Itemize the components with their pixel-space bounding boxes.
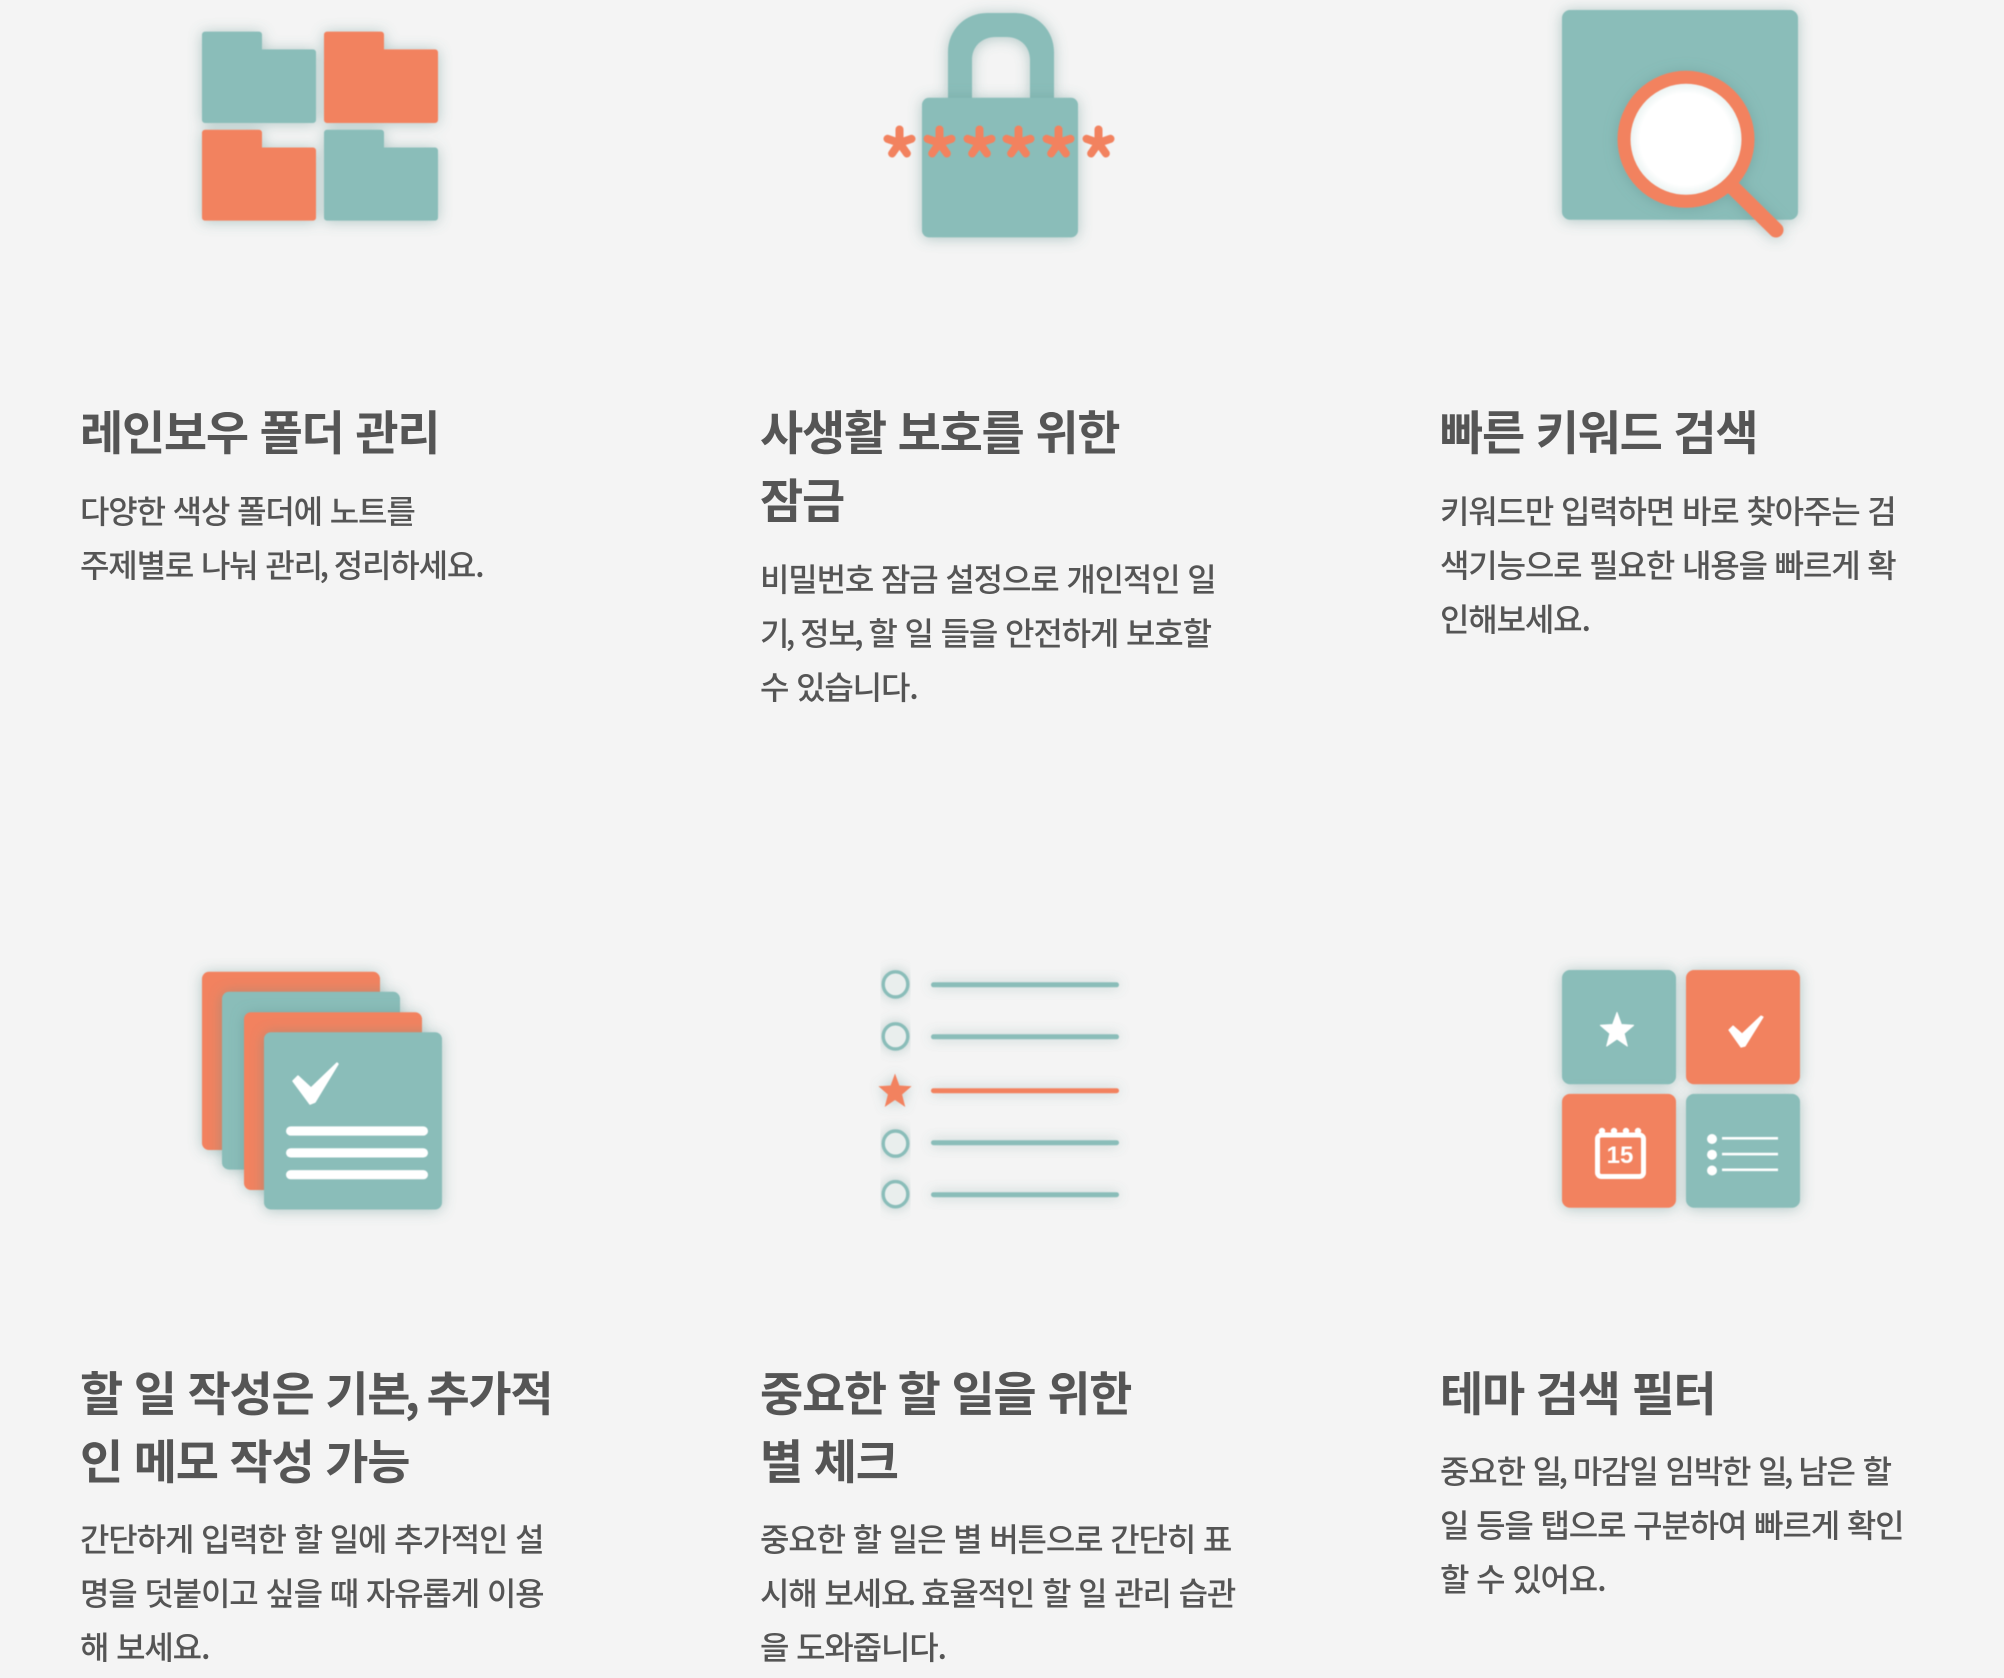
- body text: [80, 1515, 544, 1669]
- body text: 중요한 할 일은 별 버튼으로 간단히 표: [760, 1515, 1231, 1561]
- calendar: 15: [1607, 1142, 1633, 1169]
- check mark: [293, 1063, 338, 1104]
- panel: to-do with memo: [80, 964, 552, 1669]
- body text: [1440, 1447, 1903, 1601]
- body text: 키워드만 입력하면 바로 찾아주는 검: [1440, 487, 1896, 533]
- heading: 잠금: [760, 463, 844, 532]
- body text: 명을 덧붙이고 싶을 때 자유롭게 이용: [80, 1569, 543, 1615]
- panel: star check: [760, 964, 1236, 1669]
- heading: 테마 검색 필터: [1440, 1356, 1715, 1425]
- check: [1729, 1016, 1763, 1047]
- heading: [80, 1356, 552, 1493]
- heading: 빠른 키워드 검색: [1440, 395, 1757, 464]
- heading: 사생활 보호를 위한: [760, 395, 1119, 464]
- heading: 할 일 작성은 기본, 추가적: [80, 1356, 552, 1425]
- heading: 중요한 할 일을 위한: [760, 1356, 1131, 1425]
- body text: [80, 487, 484, 587]
- body text: 인해보세요.: [1440, 595, 1590, 641]
- body text: 색기능으로 필요한 내용을 빠르게 확: [1440, 541, 1896, 587]
- heading: 별 체크: [760, 1424, 898, 1493]
- padlock body: [922, 98, 1078, 237]
- panel: theme search filter: [1440, 963, 1903, 1601]
- heading: [760, 1356, 1132, 1493]
- list: [1707, 1134, 1778, 1176]
- icon: starred list: [878, 964, 1120, 1214]
- panel: keyword search: [1440, 3, 1896, 641]
- body text: 을 도와줍니다.: [760, 1623, 946, 1669]
- panel: privacy lock: [760, 6, 1216, 709]
- body text: 기, 정보, 할 일 들을 안전하게 보호할: [760, 609, 1211, 655]
- body text: 비밀번호 잠금 설정으로 개인적인 일: [760, 555, 1216, 601]
- body text: 수 있습니다.: [760, 663, 918, 709]
- body text: 중요한 일, 마감일 임박한 일, 남은 할: [1440, 1447, 1891, 1493]
- body text: 할 수 있어요.: [1440, 1555, 1606, 1601]
- body text: 다양한 색상 폴더에 노트를: [80, 487, 415, 533]
- body text: 해 보세요.: [80, 1623, 209, 1669]
- magnifier: [1624, 77, 1776, 230]
- star: [1600, 1012, 1634, 1046]
- icon: four tile filter: [1554, 963, 1808, 1217]
- body text: 주제별로 나눠 관리, 정리하세요.: [80, 541, 484, 587]
- coral star and line: [878, 1073, 1119, 1107]
- card: [1562, 10, 1798, 220]
- body text: [760, 1515, 1236, 1669]
- panel: rainbow folder management: [80, 24, 484, 587]
- body text: [1440, 487, 1896, 641]
- text lines: [286, 1126, 428, 1179]
- icon: four folders: [194, 24, 446, 230]
- icon: magnifier over card: [1554, 3, 1806, 244]
- icon: stacked sheets: [194, 964, 450, 1218]
- asterisks: [888, 130, 1110, 154]
- calendar: [1598, 1128, 1644, 1176]
- heading: [760, 395, 1120, 532]
- body text: 간단하게 입력한 할 일에 추가적인 설: [80, 1515, 543, 1561]
- icon: padlock with asterisks: [882, 6, 1116, 246]
- heading: 레인보우 폴더 관리: [80, 395, 439, 464]
- heading: 인 메모 작성 가능: [80, 1424, 409, 1493]
- body text: [760, 555, 1216, 709]
- body text: 일 등을 탭으로 구분하여 빠르게 확인: [1440, 1501, 1903, 1547]
- padlock shackle: [948, 13, 1054, 100]
- body text: 시해 보세요. 효율적인 할 일 관리 습관: [760, 1569, 1235, 1615]
